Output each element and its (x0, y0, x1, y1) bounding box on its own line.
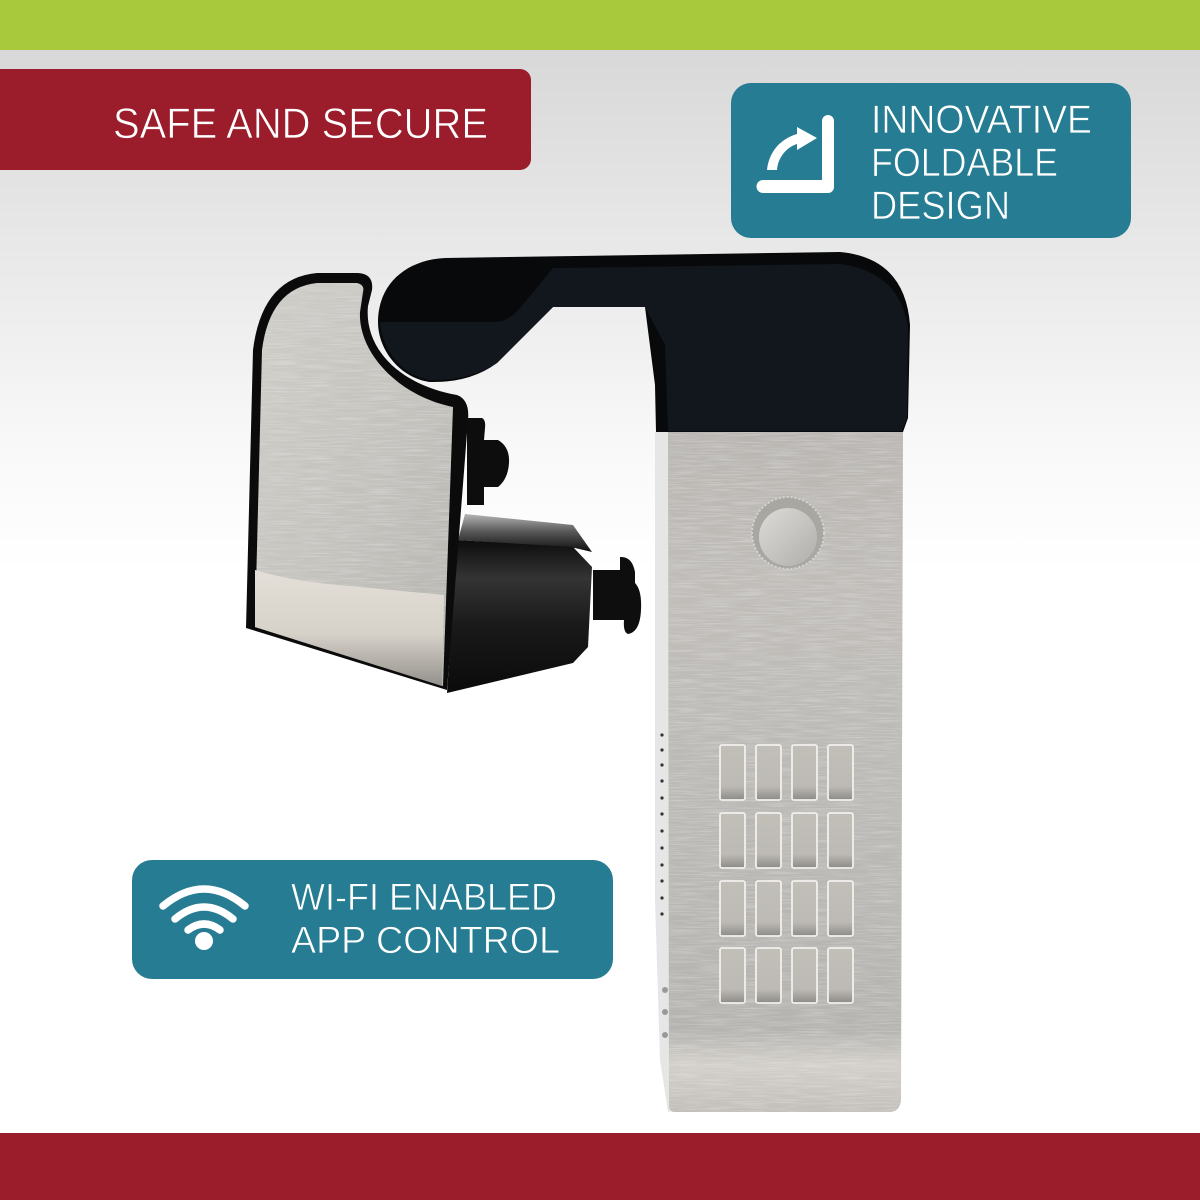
device black handle (378, 252, 910, 432)
banner: safe and secure: SAFE AND SECURE (113, 100, 488, 148)
bottom red band (0, 1133, 1200, 1200)
callout: wi-fi app control: WI-FI ENABLED (291, 877, 557, 919)
device steel body (668, 432, 903, 1112)
icon: wifi (163, 889, 245, 950)
clamp screw (467, 418, 509, 505)
callout: innovative foldable design: FOLDABLE (871, 141, 1058, 185)
product: sous vide device (246, 252, 910, 1112)
callout: innovative foldable design: DESIGN (871, 184, 1010, 228)
device side strip (655, 432, 670, 1112)
device adjust knob (752, 497, 824, 569)
callout: wi-fi app control (132, 860, 613, 979)
clamp black housing (447, 514, 641, 693)
top green band (0, 0, 1200, 50)
icon: fold arrow (757, 115, 834, 193)
background top fade (0, 50, 1200, 570)
callout: wi-fi app control: APP CONTROL (291, 920, 560, 962)
banner: safe and secure (0, 69, 531, 170)
callout: innovative foldable design (731, 83, 1131, 238)
clamp bracket (246, 273, 468, 690)
device keypad (720, 745, 853, 1003)
callout: innovative foldable design: INNOVATIVE (871, 98, 1092, 142)
